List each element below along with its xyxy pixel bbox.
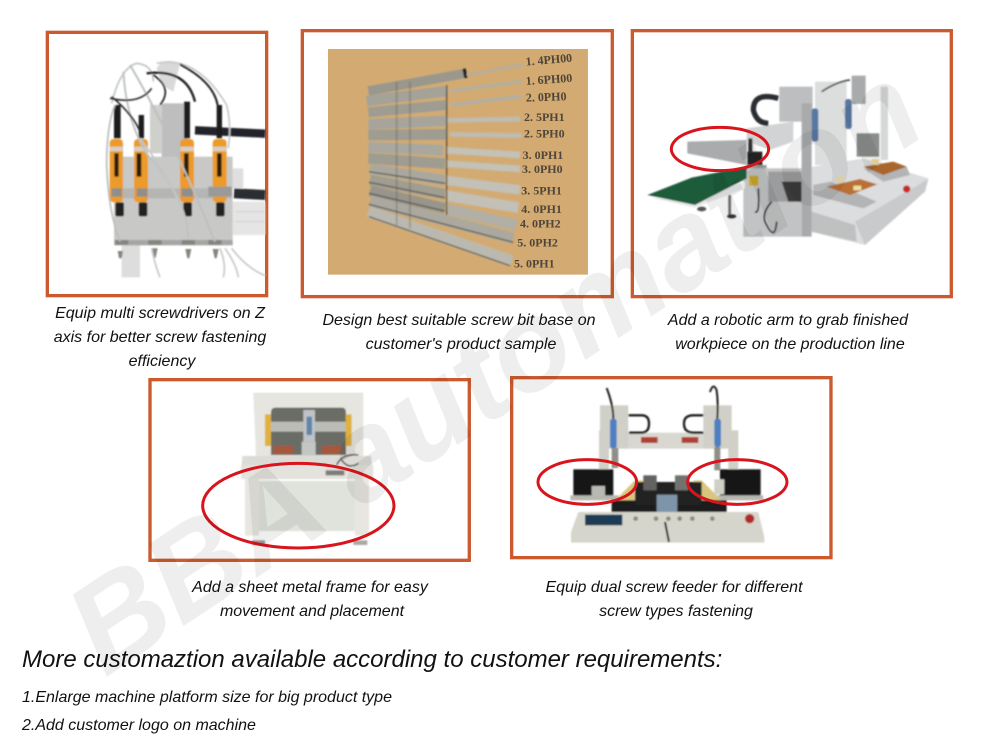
bit size labels bbox=[514, 51, 573, 270]
gantry bbox=[599, 405, 738, 480]
panel: sheet metal frame bbox=[150, 380, 469, 560]
conveyor bbox=[647, 167, 747, 218]
sheet metal frame bbox=[245, 479, 369, 545]
bit size labels: 4. 0PH1 bbox=[521, 202, 562, 216]
left feeder bbox=[570, 469, 619, 500]
mounting plates bbox=[114, 103, 233, 245]
work fixtures bbox=[265, 414, 352, 456]
heading: more customization: More customaztion available according to customer requirements: bbox=[22, 646, 722, 673]
panel: multi screwdrivers bbox=[47, 32, 267, 296]
caption: screw bit base: Design best suitable screw bit base on bbox=[322, 312, 596, 329]
caption: multi screwdrivers: Equip multi screwdrivers on Z bbox=[55, 305, 266, 322]
panel: robotic arm bbox=[632, 31, 951, 297]
caption: multi screwdrivers: axis for better screw fastening bbox=[54, 329, 266, 346]
bit size labels: 5. 0PH1 bbox=[514, 256, 555, 270]
caption: sheet metal frame: movement and placement bbox=[220, 603, 405, 620]
right feeder bbox=[713, 469, 763, 500]
control base bbox=[571, 512, 764, 543]
caption: screw bit base bbox=[322, 312, 596, 353]
panel: dual screw feeder bbox=[512, 378, 831, 558]
red highlight ellipses bbox=[538, 460, 787, 504]
caption: dual screw feeder bbox=[545, 579, 803, 620]
photo: dual gantry machine bbox=[570, 387, 764, 543]
bit size labels: 3. 5PH1 bbox=[521, 183, 562, 197]
cables bbox=[107, 62, 265, 277]
red highlight ellipse bbox=[203, 463, 394, 548]
machine top cover bbox=[253, 393, 363, 457]
center worktable bbox=[612, 475, 727, 513]
caption: dual screw feeder: screw types fastening bbox=[599, 603, 753, 620]
bit size labels: 2. 0PH0 bbox=[526, 89, 567, 105]
rail and cable chain behind bbox=[122, 61, 265, 277]
caption: sheet metal frame: Add a sheet metal frame for easy bbox=[191, 579, 429, 596]
caption: robotic arm: workpiece on the production line bbox=[675, 336, 905, 353]
bit size labels: 5. 0PH2 bbox=[517, 235, 558, 249]
red highlight ellipse bbox=[671, 127, 769, 171]
panel: screw bit samples bbox=[302, 31, 612, 297]
nozzles bbox=[115, 240, 222, 258]
blue screwdrivers bbox=[607, 387, 721, 470]
table top bbox=[241, 456, 373, 479]
bit size labels: 2. 5PH0 bbox=[524, 127, 565, 141]
bit size labels: 1. 6PH00 bbox=[525, 71, 573, 88]
watermark: BBA automation bbox=[42, 36, 946, 701]
caption: robotic arm bbox=[667, 312, 909, 353]
list: customization options: 1.Enlarge machine platform size for big product type bbox=[22, 689, 392, 706]
caption: multi screwdrivers: efficiency bbox=[129, 353, 196, 370]
fixtures bbox=[827, 159, 910, 195]
screwdrivers bbox=[110, 102, 232, 216]
photo: machine with conveyor bbox=[647, 76, 928, 245]
bit size labels: 2. 5PH1 bbox=[524, 110, 565, 124]
bit size labels: 1. 4PH00 bbox=[525, 51, 573, 69]
bit size labels: 3. 0PH1 bbox=[523, 148, 563, 162]
list: customization options bbox=[21, 689, 392, 734]
caption: dual screw feeder: Equip dual screw feeder for different bbox=[545, 579, 803, 596]
photo: screw bits bbox=[367, 64, 524, 266]
caption: multi screwdrivers bbox=[54, 305, 266, 370]
caption: robotic arm: Add a robotic arm to grab finished bbox=[667, 312, 909, 329]
caption: sheet metal frame bbox=[191, 579, 429, 620]
bit size labels: 3. 0PH0 bbox=[522, 162, 563, 176]
list: customization options: 2.Add customer logo on machine bbox=[21, 717, 256, 734]
photo: Z-axis with four screwdrivers bbox=[107, 61, 265, 277]
robotic arm bbox=[687, 140, 747, 165]
photo: machine on frame bbox=[241, 393, 373, 545]
machine bbox=[743, 76, 928, 245]
caption: screw bit base: customer's product sample bbox=[366, 336, 556, 353]
bit size labels: 4. 0PH2 bbox=[520, 217, 561, 231]
